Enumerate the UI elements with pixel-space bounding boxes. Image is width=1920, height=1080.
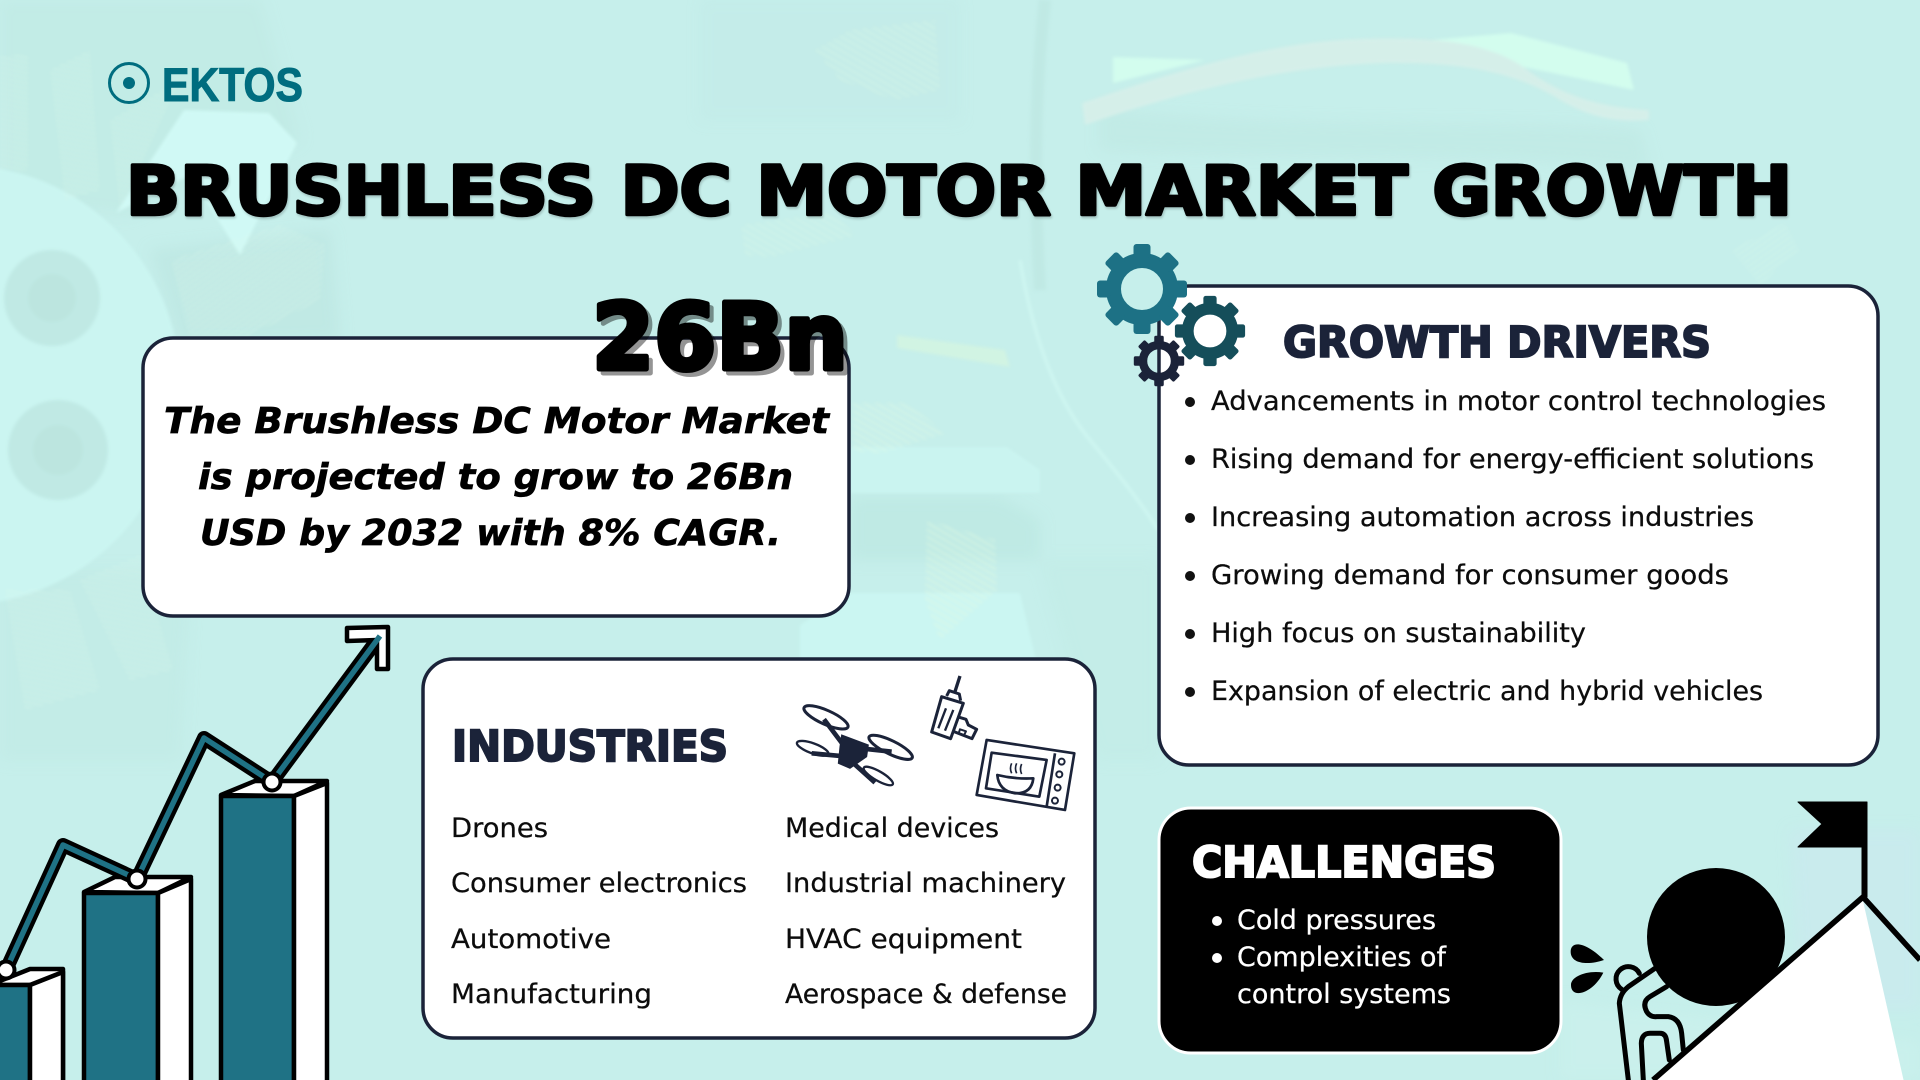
- list: industries right: [785, 813, 1067, 1010]
- mountain: [1653, 901, 1904, 1080]
- heading: growth drivers: GROWTH DRIVERS: [1283, 319, 1711, 368]
- list: industries right: Medical devices: [785, 813, 999, 844]
- list: industries right: HVAC equipment: [785, 924, 1022, 955]
- title: BRUSHLESS DC MOTOR MARKET GROWTH: [126, 152, 1792, 232]
- list: industries left: Drones: [451, 813, 548, 844]
- callout text: is projected to grow to 26Bn: [198, 457, 793, 498]
- icon: drone: [795, 701, 915, 788]
- list: industries right: Industrial machinery: [785, 868, 1066, 899]
- person: [1571, 944, 1683, 1080]
- callout text: [164, 401, 831, 554]
- logo: EKTOS: EKTOS: [162, 58, 303, 111]
- list: industries right: Aerospace & defense: [785, 979, 1067, 1010]
- chart: rising bars with arrow: [0, 627, 388, 1080]
- data points: [0, 774, 280, 978]
- list: industries left: Automotive: [451, 924, 611, 955]
- list: growth drivers: Growing demand for consumer goods: [1211, 560, 1729, 591]
- logo: EKTOS: [110, 58, 303, 111]
- list: growth drivers: Advancements in motor control technologies: [1211, 386, 1826, 417]
- list: growth drivers: Rising demand for energy-efficient solutions: [1211, 444, 1814, 475]
- list: industries left: [451, 813, 747, 1010]
- list: challenges: Cold pressures: [1237, 905, 1436, 936]
- list: challenges: Complexities of: [1237, 942, 1447, 973]
- boulder: [1647, 868, 1785, 1006]
- arrow line: [6, 627, 388, 970]
- big number: 26Bn: 26Bn: [592, 284, 848, 391]
- icon: medical device: [932, 676, 977, 739]
- bar 1: [0, 969, 63, 1080]
- heading: challenges: CHALLENGES: [1192, 839, 1496, 888]
- callout text: USD by 2032 with 8% CAGR.: [200, 513, 781, 554]
- list: challenges: control systems: [1237, 979, 1451, 1010]
- list: growth drivers: High focus on sustainability: [1211, 618, 1586, 649]
- icon: microwave: [977, 740, 1074, 810]
- list: industries left: Consumer electronics: [451, 868, 747, 899]
- flag: [1798, 802, 1867, 897]
- light areas and cable: [850, 447, 1040, 493]
- list: challenges: [1212, 905, 1451, 1010]
- list: growth drivers: Increasing automation across industries: [1211, 502, 1754, 533]
- motor hub: [0, 165, 180, 605]
- panel: market callout: [143, 284, 849, 616]
- callout text: The Brushless DC Motor Market: [164, 401, 831, 442]
- coils and bolts: [0, 50, 180, 210]
- heading: industries: INDUSTRIES: [452, 723, 728, 772]
- wires: [1113, 57, 1205, 83]
- list: industries left: Manufacturing: [451, 979, 652, 1010]
- bar 2: [84, 877, 191, 1080]
- list: growth drivers: [1185, 386, 1826, 707]
- list: growth drivers: Expansion of electric and hybrid vehicles: [1211, 676, 1763, 707]
- bar 3: [221, 781, 327, 1080]
- panel: growth drivers: [1159, 286, 1878, 765]
- icon: person pushing boulder uphill: [1571, 802, 1920, 1080]
- icon: gears: [1097, 244, 1245, 386]
- panel: challenges: [1159, 808, 1561, 1053]
- panel: industries: [423, 659, 1095, 1038]
